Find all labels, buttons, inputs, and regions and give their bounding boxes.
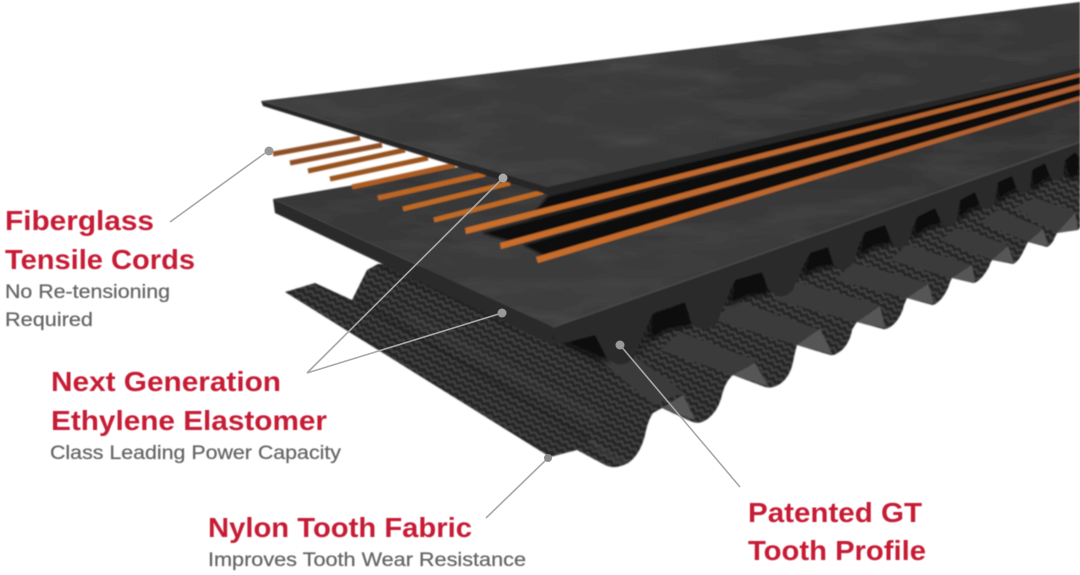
label: patented GT tooth profile	[748, 497, 926, 566]
label: nylon tooth fabric: Nylon Tooth Fabric	[208, 512, 472, 543]
leader lines: next generation ethylene elastomer	[307, 174, 508, 373]
middle elastomer sheet	[273, 60, 1080, 345]
label: fiberglass tensile cords: No Re-tensioning	[5, 282, 170, 303]
label: fiberglass tensile cords: Required	[5, 310, 93, 331]
label: fiberglass tensile cords: Fiberglass	[5, 205, 154, 236]
fabric tooth fold	[357, 300, 590, 440]
fabric lit facets	[662, 213, 1078, 420]
label: patented GT tooth profile: Patented GT	[748, 497, 922, 528]
leader line: nylon tooth fabric	[486, 454, 552, 518]
label: fiberglass tensile cords: Tensile Cords	[5, 244, 195, 275]
leader line: patented GT tooth profile	[616, 340, 740, 487]
tooth profile side	[553, 142, 1080, 365]
fabric shading near the sheet	[377, 154, 1078, 373]
label: next generation ethylene elastomer: Ethylene Elastomer	[51, 405, 327, 436]
nylon tooth fabric layer	[284, 151, 1080, 468]
label: next generation ethylene elastomer	[50, 366, 342, 464]
leader line: fiberglass tensile cords	[170, 146, 274, 222]
black tooth valleys	[562, 148, 1080, 362]
label: nylon tooth fabric	[208, 512, 526, 571]
fabric lands	[600, 198, 1075, 405]
label: next generation ethylene elastomer: Next Generation	[51, 366, 281, 397]
belt illustration	[261, 2, 1080, 475]
top elastomer sheet	[261, 2, 1080, 195]
label: fiberglass tensile cords	[5, 205, 195, 331]
fiberglass tensile cords	[273, 73, 1080, 263]
label: next generation ethylene elastomer: Class Leading Power Capacity	[50, 443, 342, 464]
shadows between cords	[482, 68, 1080, 256]
label: nylon tooth fabric: Improves Tooth Wear Resistance	[208, 550, 526, 571]
label: patented GT tooth profile: Tooth Profile	[748, 535, 926, 566]
